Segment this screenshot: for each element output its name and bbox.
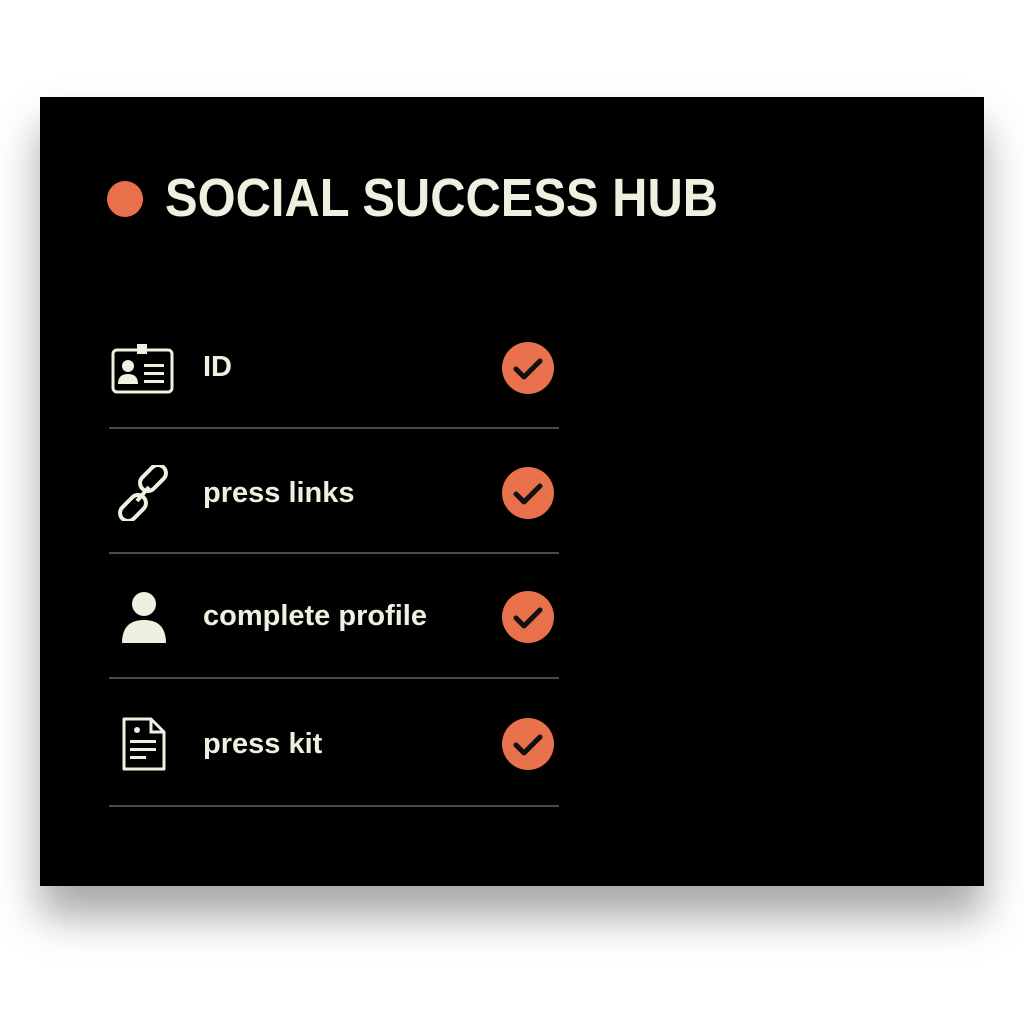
row: complete profile: [122, 591, 554, 643]
check badge: [502, 342, 554, 394]
check badge: [502, 467, 554, 519]
title: SOCIAL SUCCESS HUB: [165, 168, 718, 228]
label: press links: [203, 477, 355, 509]
check badge: [502, 718, 554, 770]
icon: document: [122, 718, 166, 770]
icon: id card: [112, 344, 174, 394]
check badge: [502, 591, 554, 643]
icon: link: [118, 465, 168, 521]
row: press kit: [122, 718, 554, 770]
panel: checklist card: [40, 97, 984, 886]
row: ID: [112, 342, 554, 394]
icon: person: [122, 592, 166, 643]
label: press kit: [203, 728, 322, 760]
label: complete profile: [203, 600, 427, 632]
label: ID: [203, 351, 232, 383]
row: press links: [118, 465, 554, 521]
icon: orange dot: [107, 181, 143, 217]
